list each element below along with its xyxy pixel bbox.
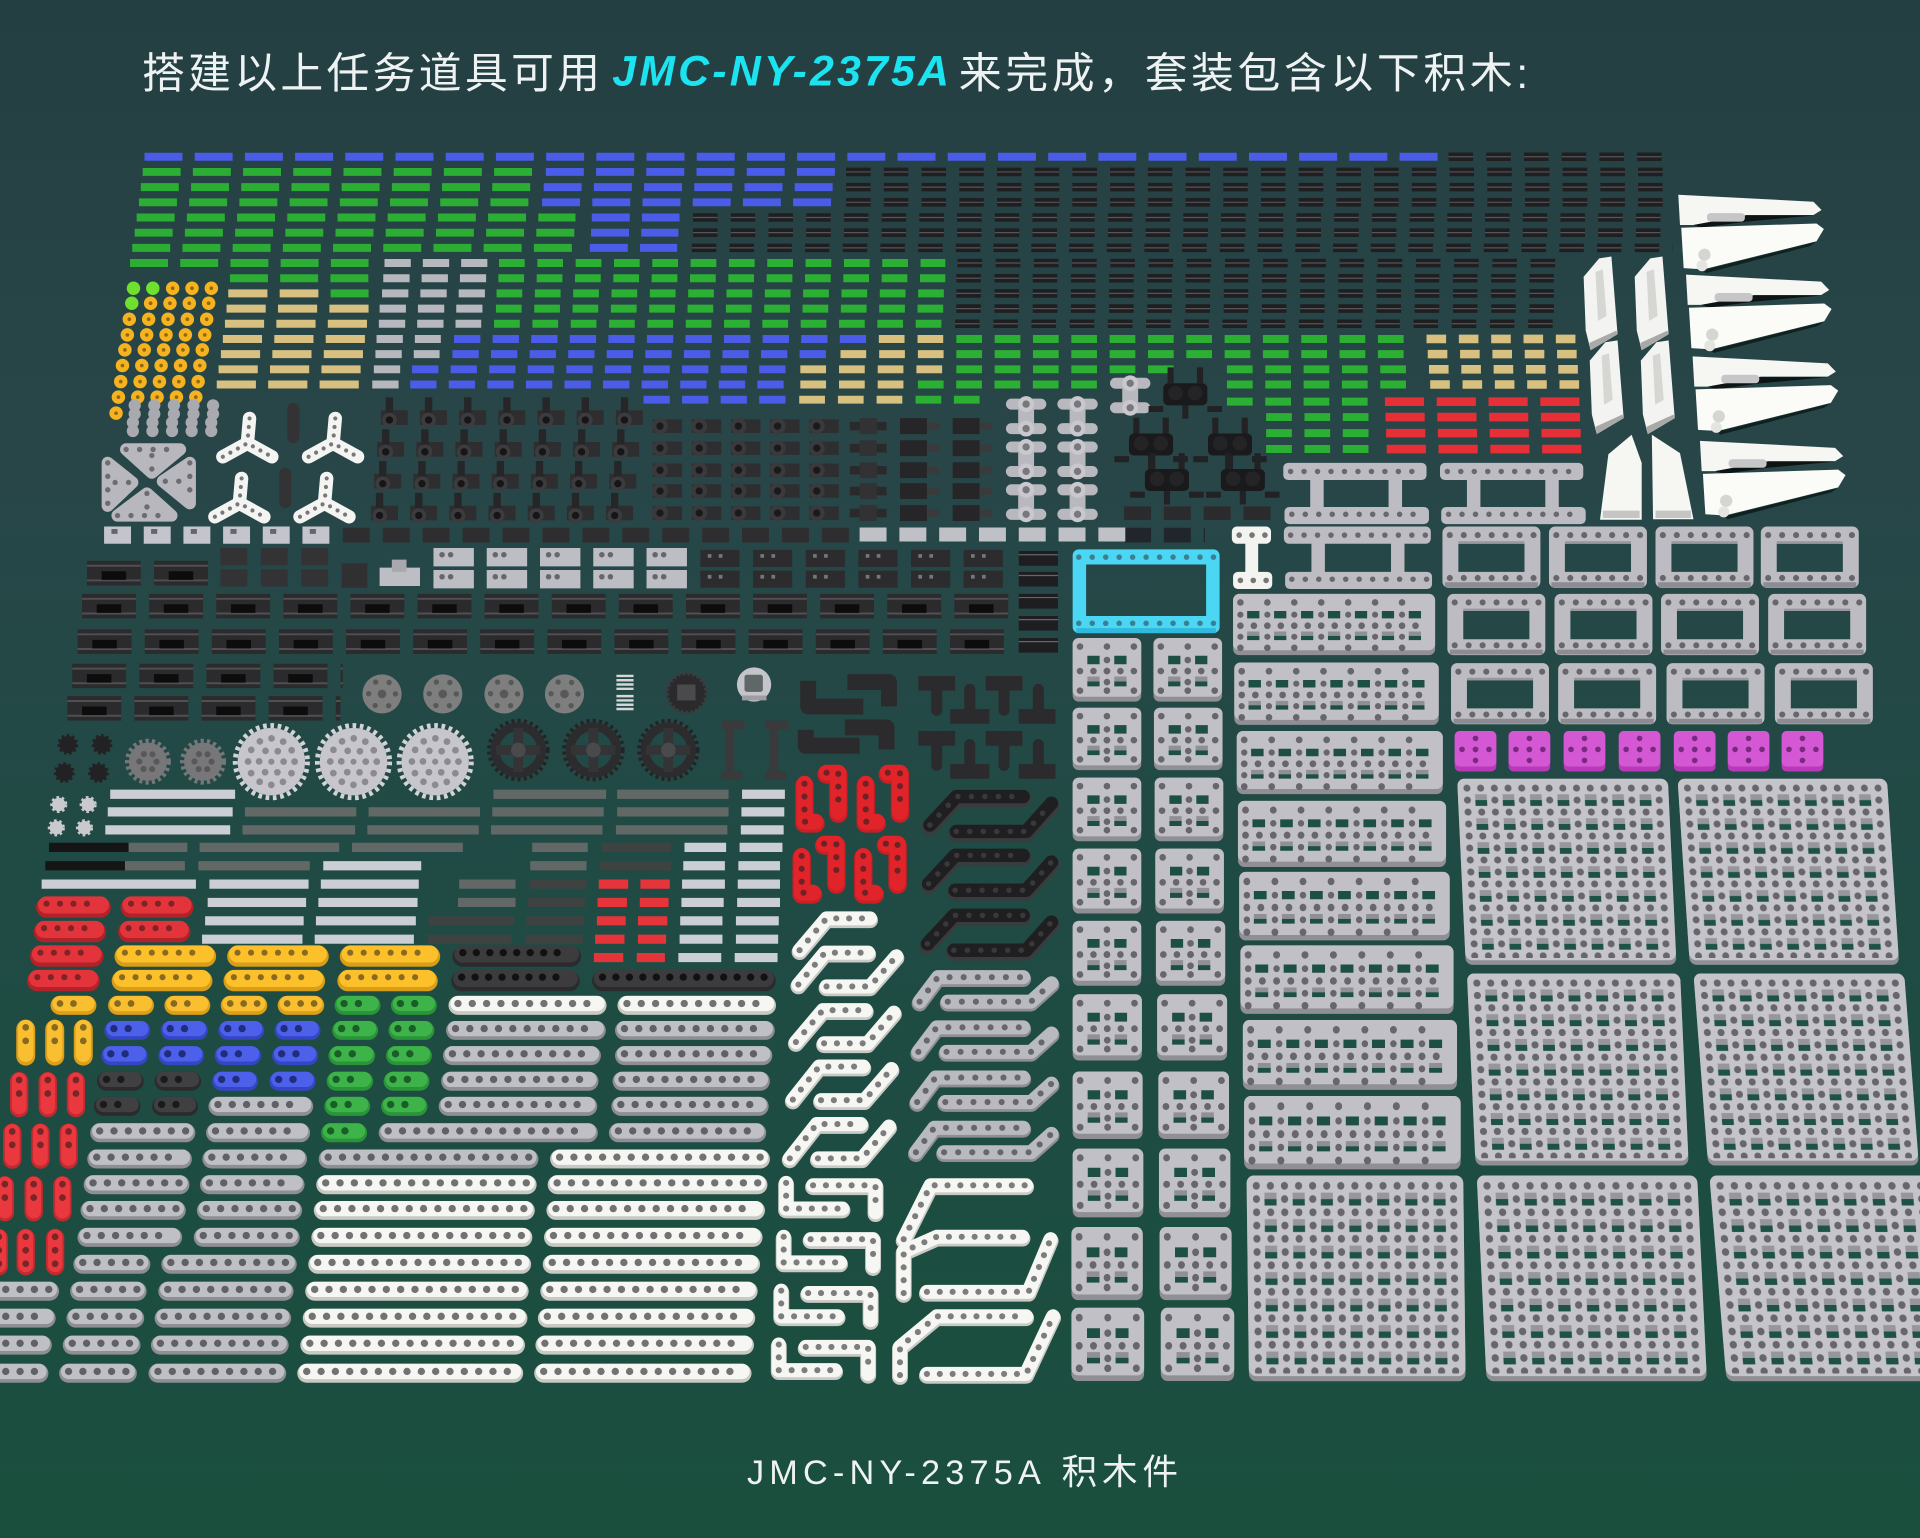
bottom caption	[747, 1452, 1178, 1492]
red vertical beams	[0, 1080, 76, 1266]
bottom caption: 积木件	[1062, 1452, 1178, 1492]
dark stripe pieces	[1124, 513, 1283, 535]
dark grey rods	[125, 794, 729, 902]
red L beams	[802, 773, 900, 895]
black thick beams	[462, 953, 765, 981]
grey H frames	[1283, 463, 1586, 589]
white Y connectors	[215, 418, 358, 517]
black turntable gear	[667, 673, 706, 713]
rods	[42, 794, 785, 958]
grey bent beams	[916, 977, 1051, 1154]
white I connector	[1232, 527, 1272, 589]
black bent beams	[927, 797, 1051, 953]
small grey gears	[50, 798, 95, 835]
red short rods	[594, 884, 670, 958]
title: JMC-NY-2375A	[612, 48, 949, 96]
title: 搭建以上任务道具可用	[142, 50, 600, 98]
blue long pieces	[144, 157, 1438, 248]
grey cam	[737, 667, 771, 702]
white bent beams	[790, 918, 896, 1160]
black short pieces	[692, 157, 1673, 324]
grey wheels	[362, 674, 584, 714]
black rods	[45, 847, 129, 866]
white curved panels	[1584, 257, 1675, 434]
large black gears	[490, 721, 697, 779]
black bars	[721, 721, 789, 779]
bottom caption: JMC-NY-2375A	[747, 1454, 1041, 1492]
yellow thick beams	[122, 953, 430, 981]
grey blocks	[380, 555, 698, 579]
open frames	[1442, 527, 1873, 724]
tan long pieces	[217, 293, 369, 385]
small connector grid	[130, 157, 1673, 449]
black small blocks	[220, 555, 1058, 645]
large plates	[1247, 779, 1920, 1381]
grey four-triangle plate	[108, 449, 190, 516]
black angle connectors	[653, 426, 992, 513]
yellow small beams	[26, 1003, 315, 1056]
black capsules	[285, 409, 293, 502]
green short pieces	[494, 263, 1409, 449]
green beams	[331, 1003, 427, 1133]
black small beams	[103, 1079, 192, 1106]
light rods	[42, 794, 785, 958]
blue short pieces	[410, 339, 867, 400]
black wide connectors	[67, 566, 1009, 716]
thick beams	[37, 904, 765, 981]
small dark gears	[56, 736, 111, 781]
red pins	[1385, 402, 1583, 449]
darker rods	[427, 847, 671, 939]
liftarm beams	[0, 773, 1053, 1377]
black assemblies	[1114, 367, 1280, 505]
cyan frame	[1073, 549, 1220, 633]
title: 来完成，套装包含以下积木:	[959, 50, 1528, 98]
white wing panels	[1678, 195, 1846, 519]
square plates column	[1071, 638, 1234, 1381]
tan short pieces	[799, 339, 1583, 400]
green long pieces	[130, 172, 576, 293]
grey beams	[0, 1029, 765, 1373]
white beams	[307, 1003, 767, 1373]
white triangular panels	[1600, 435, 1693, 520]
grey cross connectors	[1011, 375, 1145, 522]
grey bushings	[133, 405, 216, 431]
long plates column	[1233, 594, 1461, 1169]
medium grey gears	[127, 741, 224, 782]
grey short pieces	[372, 263, 487, 385]
magenta connectors	[1455, 731, 1823, 771]
black elbows	[371, 405, 655, 516]
worm gears	[618, 675, 632, 711]
large light gears	[235, 726, 471, 798]
white brackets	[779, 1183, 1053, 1377]
black L beams	[806, 681, 889, 749]
black T beams	[918, 683, 1056, 771]
blue beams	[111, 1029, 311, 1081]
yellow rings	[116, 288, 212, 413]
row of small grey blocks	[104, 531, 1127, 535]
title	[142, 48, 1528, 98]
red thick beams	[37, 904, 183, 981]
